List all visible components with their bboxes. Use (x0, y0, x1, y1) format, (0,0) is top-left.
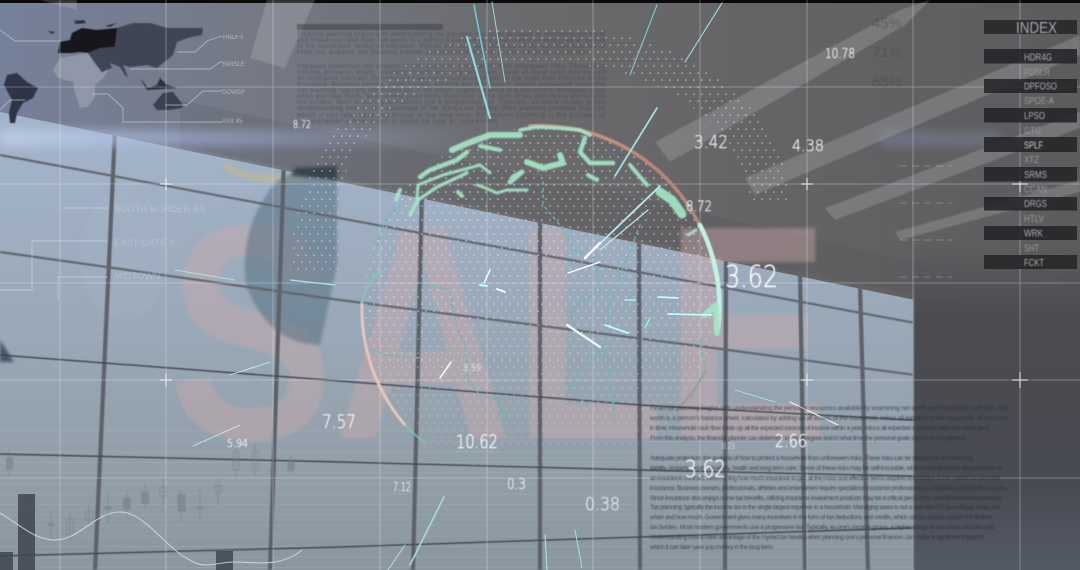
floating data values: 8.72 (293, 118, 311, 131)
floating data values: 8.72 (686, 199, 712, 215)
floating data values: 3.42 (694, 132, 728, 153)
text block: top article: and household cash flow. Net worth is a person's balance sheet, calculated by adding up all assets (297, 38, 605, 44)
glowing continents (396, 127, 717, 333)
floating data values: 0.3 (507, 475, 526, 493)
text block: top article: liability, property, death, disability, health and long term care. Some of these risks may be self (297, 70, 605, 76)
floating data values (227, 47, 855, 515)
text block: bottom article: which it can later save you money in the long term. (649, 544, 774, 551)
continent: Australia (153, 92, 183, 110)
index row labels: FOSLR (1024, 68, 1050, 78)
index row bars (984, 49, 1077, 269)
dark volume bars (0, 494, 233, 570)
map callout text: ASX 85 (222, 119, 243, 125)
continent: Europe (58, 28, 117, 53)
text block: bottom article: worth is a person's balance sheet, calculated by adding up all assets of the household, minus all liabilities of the household, at one point (649, 415, 1008, 422)
text block: bottom article: liability, property, death, disability, health and long term care. Some of these risks may be self-insurable, while most will require the purchase of (650, 465, 1002, 472)
continent outlines (372, 182, 705, 425)
globe with glowing continents (175, 2, 838, 570)
text block: top article: which it can later save you money in the long term. Retirement planning is the process of (296, 113, 605, 119)
index row labels: HTLV (1024, 214, 1044, 225)
diagonal light bands (40, 0, 1080, 240)
text block: bottom article: an insurance contract. Determining how much insurance to get, at the most cost effective terms requires knowledge of the market for personal (650, 475, 1000, 482)
map callout text: DOWGF (222, 90, 245, 96)
map callout lines and labels (0, 30, 222, 122)
index heading: INDEX (1016, 20, 1057, 37)
islands (48, 20, 177, 90)
text block: top article: Adequate protection: the analysis of how to protect a household from unforeseen risks. These risks (297, 64, 605, 70)
text block: bottom article: Tax planning: typically the income tax is the single largest expense in a household. Managing taxes is not a question of if you will pay taxes, but (650, 504, 1000, 511)
graphic: pink SALE lettering and shapes (0, 162, 830, 503)
light streaks (175, 2, 838, 570)
text block: bottom article: insurance. Business owners, professionals, athletes and entertainers require specialized insurance professionals to adequately protect themselves. (650, 485, 1008, 492)
candlestick chart (6, 445, 294, 540)
location labels: EAST GATE X (114, 238, 176, 249)
text block: top article: Tax planning: typically the income tax is the single largest expense in a household. Managing taxes (297, 88, 605, 94)
text block: top article: understanding how much it costs to live at retirement (297, 119, 497, 125)
location labels (114, 204, 205, 282)
continent: Asia (88, 23, 203, 77)
text block: top article: when and how much. Government gives many incentives in the form of tax deductions and credits (296, 94, 605, 100)
map callout text: HNDFX (223, 35, 244, 41)
text block: top article: an insurance contract. Determining how much insurance to get, at the most cost effective terms (297, 76, 605, 82)
continent: South America (4, 73, 38, 123)
text block: bottom article: in time. Household cash flow totals up all the expected sources of income within a year, minus all expected expenses within the same year. (650, 425, 990, 432)
floating data values: 5.94 (227, 437, 248, 450)
grid crosshairs (160, 176, 1028, 388)
window frames (0, 130, 1000, 570)
index row labels: SPOE-A (1024, 96, 1054, 107)
text block: top article: insurance. Business owners, professionals, athletes and entertainers require specialized insurance (297, 82, 606, 88)
text block: bottom article: tax burden. Most modern governments use a progressive tax. Typically, as one's income grows, a higher marginal rate of tax must be paid. (650, 524, 996, 531)
lens flare (0, 130, 1000, 146)
text block: bottom article: Understanding how to take advantage of the myriad tax breaks when planning one's personal finances can make a significant impact in (650, 534, 984, 541)
floating data values: 3.62 (685, 457, 726, 483)
world map (4, 20, 203, 123)
index panel (984, 20, 1077, 269)
faded percentage figures (872, 15, 902, 91)
floating data values: 0.23 (722, 442, 735, 451)
faded percentage figures: 45% (872, 15, 902, 32)
map callout text: SWISLE (222, 62, 245, 68)
continent: Africa (53, 53, 110, 108)
globe rim (362, 126, 719, 443)
graphic: pink SALE lettering and shapes: SALE (168, 162, 830, 503)
text block: top article: Financial planning begins with understanding the personal resources available by examining net worth (297, 32, 605, 38)
index row labels: SHT (1024, 244, 1039, 254)
floating data values: 3.59 (463, 363, 481, 374)
text block: top article (296, 24, 606, 125)
index row labels: DRGS (1024, 199, 1047, 210)
text block: bottom article: when and how much. Government gives many incentives in the form of tax deductions and credits, which can be used to reduce the lifetime (649, 514, 992, 521)
faded percentage figures: 68% (872, 74, 902, 91)
index row labels (1024, 52, 1057, 269)
dotted sphere (290, 25, 790, 479)
index row labels: DPFOSO (1024, 82, 1057, 92)
location labels: MIDTOWN (114, 271, 160, 282)
location labels: SOUTH BORDER B3 (114, 204, 205, 215)
index row labels: WRK (1024, 228, 1043, 240)
index row labels: GTG (1024, 126, 1041, 137)
floating data values: 7.57 (322, 411, 356, 433)
floating data values: 3.62 (725, 260, 778, 295)
wave line (0, 512, 302, 565)
text block: bottom article: Financial planning begins with understanding the personal resources available by examining net worth and household cash flow. Net (650, 405, 1008, 412)
text block: bottom article (649, 405, 1008, 551)
text block: top article: From this analysis, the financial planner can determine to what degree the goals can be met (297, 50, 587, 56)
index row labels: FCKT (1024, 258, 1044, 269)
index row labels: SRMS (1024, 170, 1047, 181)
location leader lines (0, 208, 108, 300)
index row labels: CCAN (1024, 184, 1047, 196)
faded percentage figures: 71% (872, 44, 902, 61)
dashed ticker lines (900, 166, 952, 277)
index row labels: LPSO (1024, 111, 1045, 122)
floating data values: 0.38 (585, 494, 620, 515)
text block: top article: of the household, minus all liabilities. Household cash flow totals up all the expected sources of (297, 44, 605, 50)
floating data values: 10.62 (456, 431, 498, 453)
floating data values: 7.12 (393, 480, 411, 494)
floating data values: 4.38 (792, 136, 824, 155)
text block: top article: tax burden. Most modern governments use a progressive tax. Typically, as one's income grows (297, 100, 605, 106)
text block: top article: Understanding how to take advantage of the myriad tax breaks when planning personal finances (297, 106, 605, 112)
text block: bottom article: From this analysis, the financial planner can determine to what degree and in what time the personal goals can be accomplished. (650, 435, 966, 442)
index row labels: XTZ (1024, 155, 1039, 166)
index row labels: SPLF (1024, 140, 1043, 152)
index row labels: HDR4G (1024, 52, 1052, 64)
map callout text (222, 35, 245, 125)
floating data values: 2.66 (775, 431, 807, 452)
index heading (984, 20, 1077, 37)
text block: bottom article: Adequate protection: the analysis of how to protect a household from unforeseen risks. These risks can be divided into the following: (650, 455, 974, 462)
text block: bottom article: Since insurance also enjoys some tax benefits, utilizing insurance investment products may be a critical piece of the overall investment planning. (650, 495, 1002, 502)
floating data values: 10.78 (825, 47, 855, 62)
